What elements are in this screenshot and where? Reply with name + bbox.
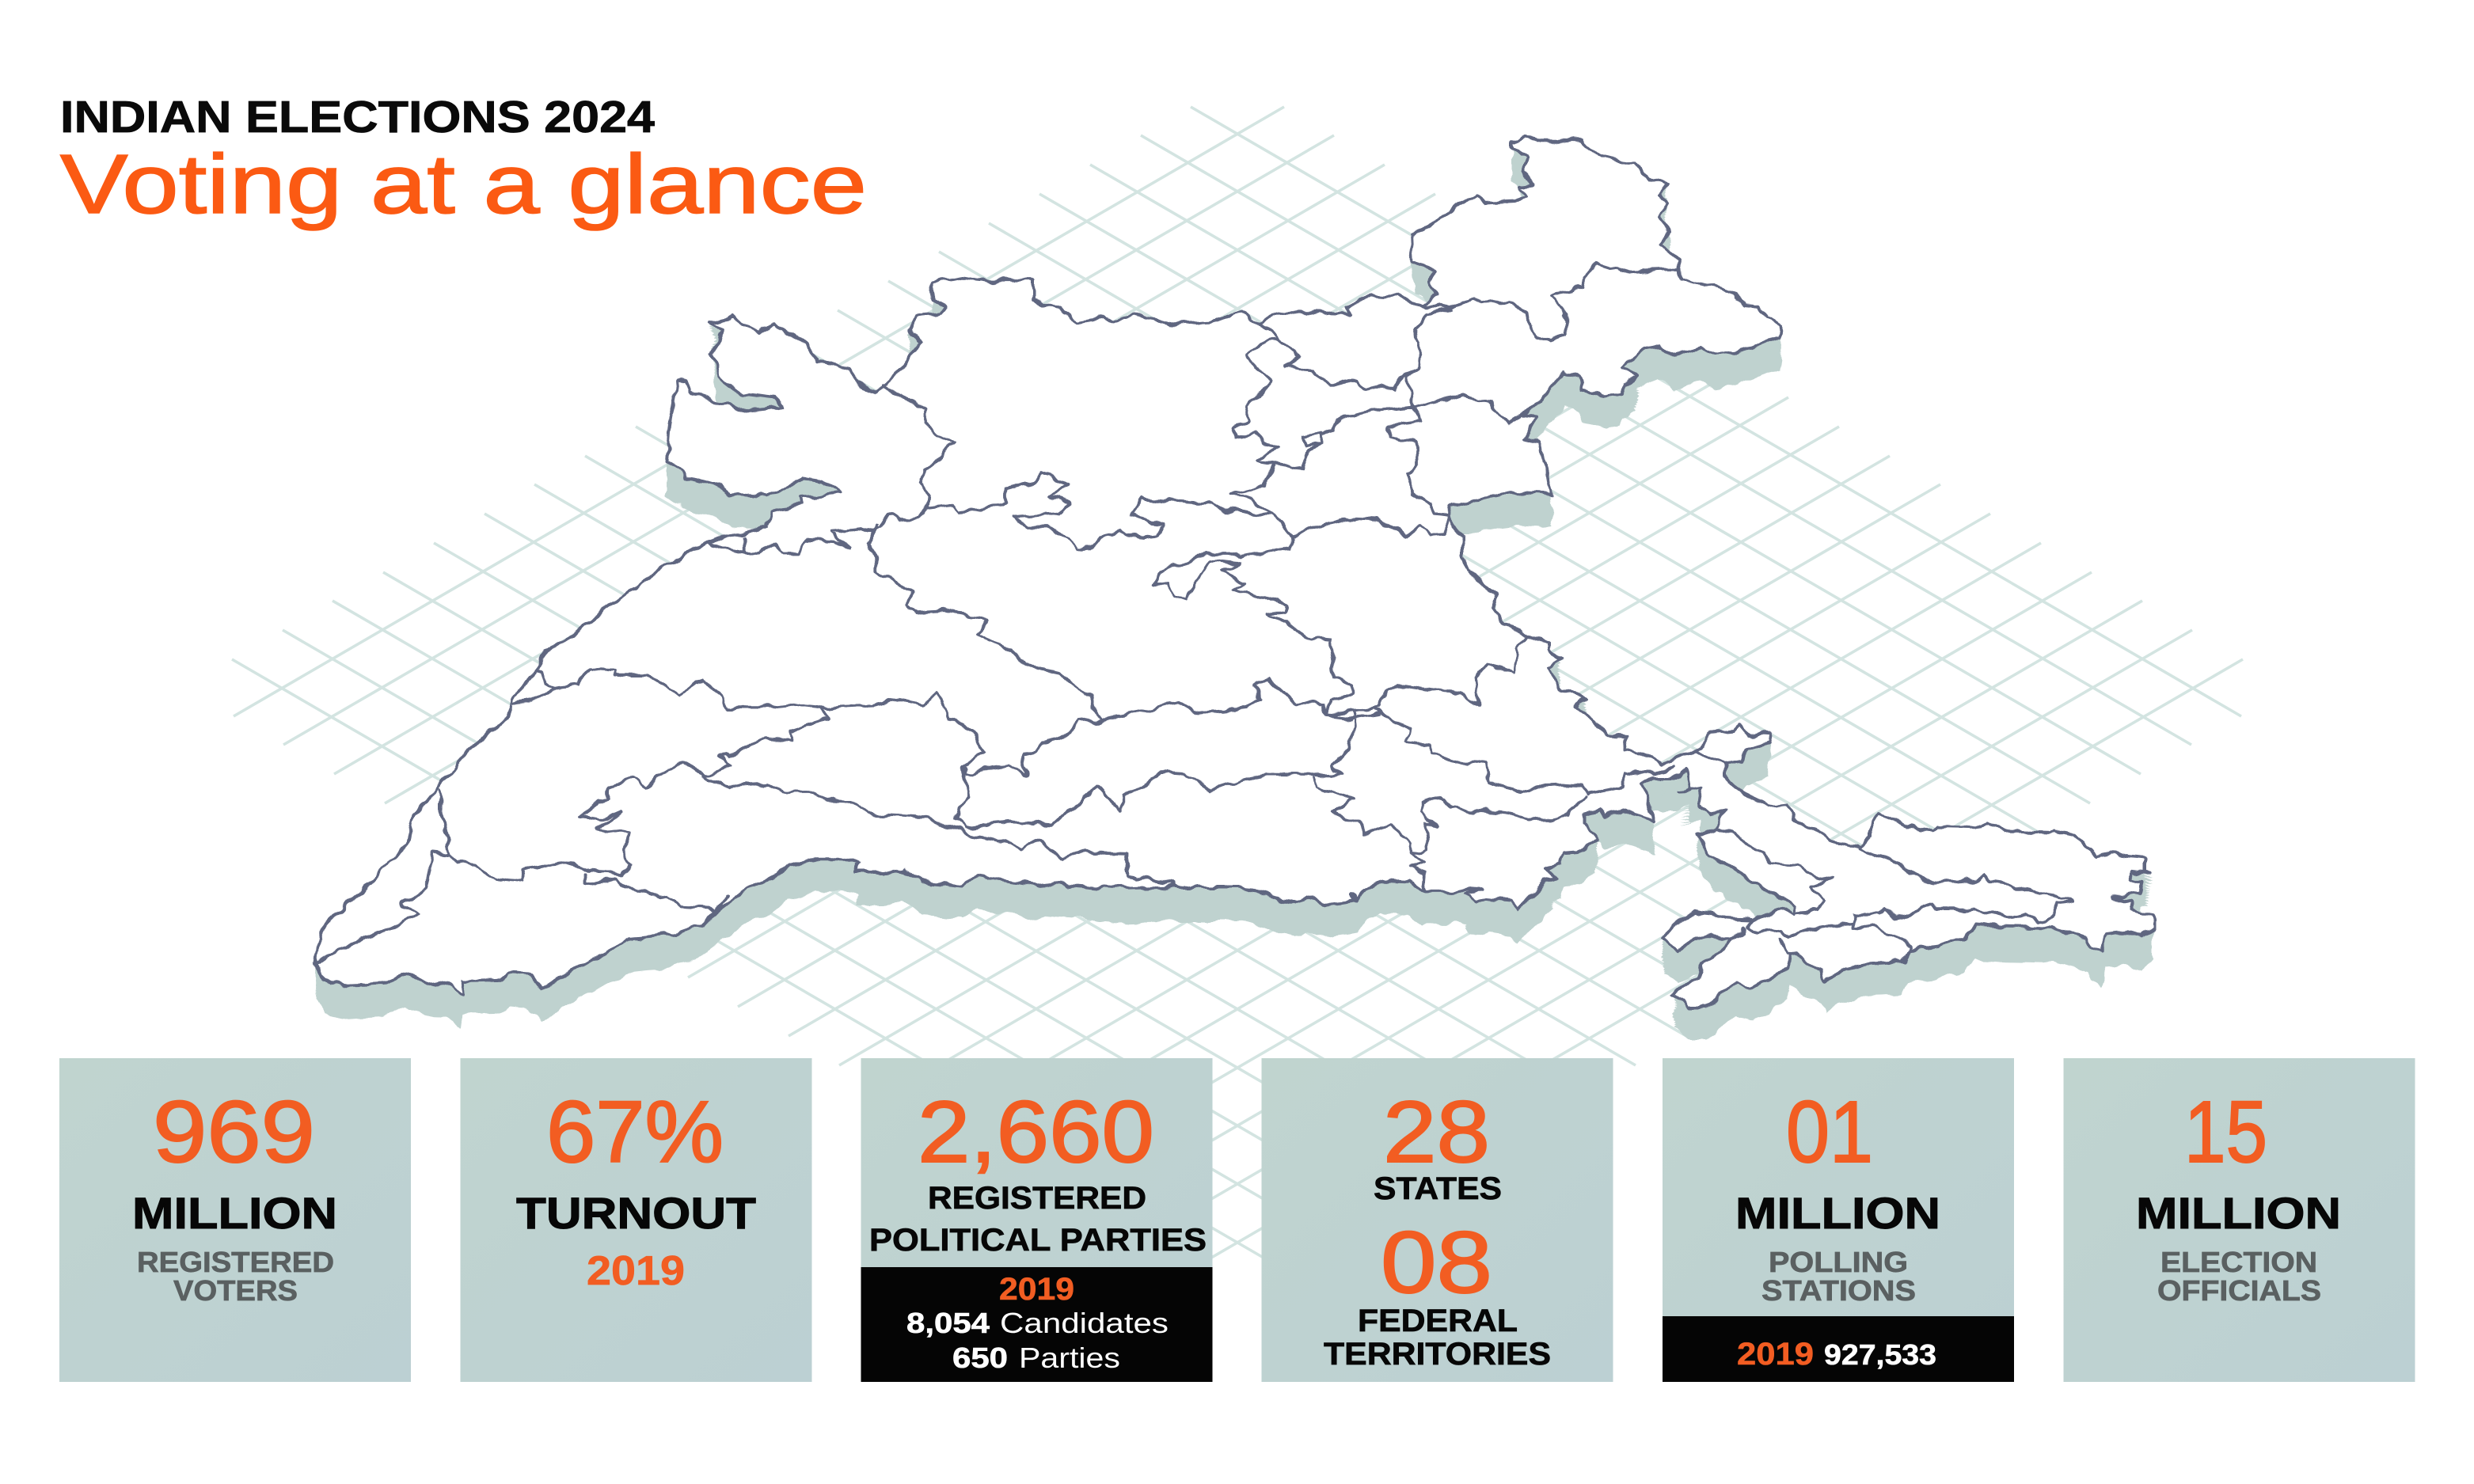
label: turnout: TURNOUT bbox=[516, 1188, 756, 1238]
label: registered voters: VOTERS bbox=[173, 1274, 298, 1307]
black band: 2019 stations: 2019 bbox=[1737, 1337, 1814, 1372]
label: federal territories: TERRITORIES bbox=[1324, 1337, 1551, 1372]
stat: 28: 28 bbox=[1383, 1084, 1490, 1181]
panel: states and territories bbox=[1262, 1058, 1613, 1382]
map extrusion shadow bbox=[316, 138, 2153, 1040]
label: election officials bbox=[2157, 1246, 2321, 1307]
panel: registered voters bbox=[59, 1058, 411, 1382]
panel: turnout bbox=[461, 1058, 812, 1382]
label: election officials: ELECTION bbox=[2160, 1246, 2317, 1278]
black band: 2019 stations: 927,533 bbox=[1824, 1338, 1936, 1371]
stat: 15: 15 bbox=[2184, 1084, 2267, 1181]
map lake bbox=[1347, 892, 1359, 900]
stat: 2,660: 2,660 bbox=[918, 1084, 1154, 1181]
background grid bbox=[232, 107, 2243, 1269]
label: polling stations: STATIONS bbox=[1761, 1274, 1916, 1307]
label: registered political parties: POLITICAL PARTIES bbox=[869, 1223, 1207, 1258]
label: registered political parties: REGISTERED bbox=[928, 1181, 1146, 1216]
black band: 2019 stations bbox=[1663, 1316, 2014, 1382]
label: polling stations bbox=[1761, 1246, 1916, 1307]
label: federal territories: FEDERAL bbox=[1358, 1304, 1518, 1338]
title heading: Voting at a glance bbox=[60, 138, 867, 231]
label: polling stations: POLLING bbox=[1769, 1246, 1908, 1278]
panel: polling stations bbox=[1663, 1058, 2014, 1382]
map of India bbox=[316, 135, 2153, 1040]
state borders bbox=[316, 264, 2073, 962]
panel: political parties bbox=[861, 1058, 1213, 1382]
label: 2019: 2019 bbox=[587, 1248, 685, 1294]
label: million: MILLION bbox=[2136, 1188, 2341, 1238]
label: registered voters bbox=[137, 1246, 334, 1307]
label: million: MILLION bbox=[1735, 1188, 1940, 1238]
label: federal territories bbox=[1324, 1304, 1551, 1372]
black band: 2019 parties bbox=[861, 1267, 1213, 1382]
title bbox=[60, 92, 867, 231]
label: million: MILLION bbox=[132, 1188, 337, 1238]
stat: 08: 08 bbox=[1381, 1214, 1492, 1311]
title kicker: INDIAN ELECTIONS 2024 bbox=[60, 92, 655, 142]
black band: 2019 parties: Candidates bbox=[1000, 1307, 1169, 1339]
black band: 2019 parties: 2019 bbox=[999, 1272, 1074, 1307]
black band: 2019 parties: 8,054 bbox=[906, 1307, 990, 1339]
label: states: STATES bbox=[1374, 1171, 1502, 1206]
label: registered political parties bbox=[869, 1181, 1207, 1258]
map outer outline bbox=[316, 135, 2153, 1007]
label: registered voters: REGISTERED bbox=[137, 1246, 334, 1278]
stat: 01: 01 bbox=[1786, 1084, 1873, 1181]
stat: 67%: 67% bbox=[546, 1084, 724, 1181]
black band: 2019 parties: 650 bbox=[952, 1342, 1008, 1374]
label: election officials: OFFICIALS bbox=[2157, 1274, 2321, 1307]
black band: 2019 parties: Parties bbox=[1019, 1342, 1120, 1374]
stat: 969: 969 bbox=[153, 1084, 315, 1181]
panel: election officials bbox=[2063, 1058, 2415, 1382]
